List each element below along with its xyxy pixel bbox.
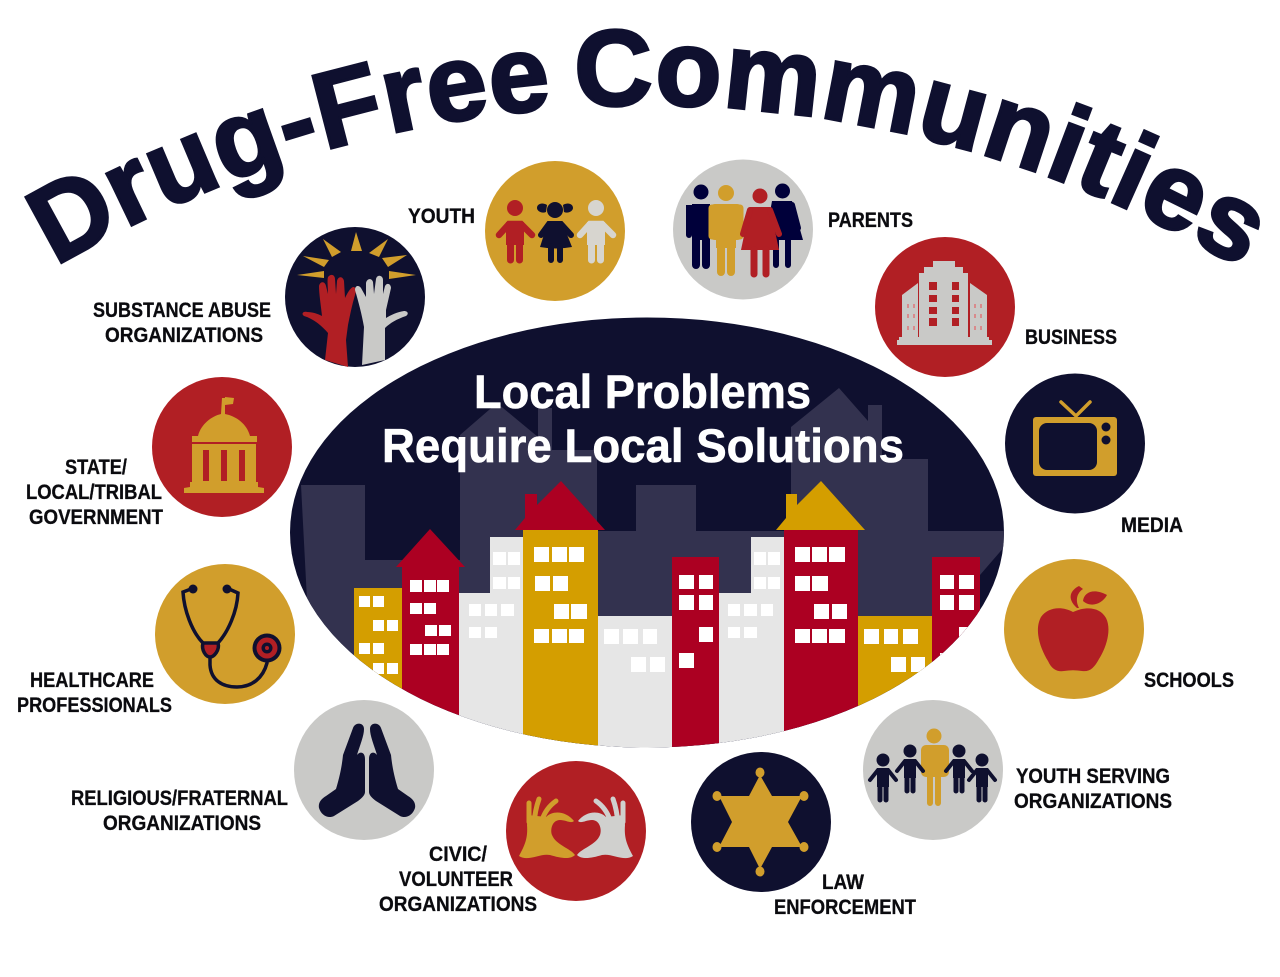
label: youth serving organizations: YOUTH SERVING xyxy=(1016,765,1170,788)
label: law enforcement xyxy=(774,871,916,919)
icon: media xyxy=(1005,374,1145,514)
foreground buildings xyxy=(354,481,980,753)
right praying hand xyxy=(369,724,415,817)
label: government: STATE/ xyxy=(65,456,127,479)
label: religious organizations: RELIGIOUS/FRATERNAL xyxy=(71,787,288,810)
white building right xyxy=(719,537,784,753)
gold hand xyxy=(519,799,575,858)
label: government xyxy=(26,456,163,529)
icon: parents xyxy=(673,160,813,300)
oval headline xyxy=(382,365,904,472)
oval headline: Local Problems xyxy=(474,365,811,418)
label: business: BUSINESS xyxy=(1025,326,1117,349)
icon: youth serving organizations xyxy=(863,700,1003,840)
label: substance abuse organizations: ORGANIZATIONS xyxy=(105,324,263,347)
label: religious organizations xyxy=(71,787,288,835)
sun rays xyxy=(297,232,416,279)
icon: law enforcement xyxy=(691,752,831,892)
oval headline: Require Local Solutions xyxy=(382,419,904,472)
label: civic volunteer organizations: ORGANIZATIONS xyxy=(379,893,537,916)
label: schools: SCHOOLS xyxy=(1144,669,1234,692)
icon: government xyxy=(152,377,292,517)
label: religious organizations: ORGANIZATIONS xyxy=(103,812,261,835)
central oval panel xyxy=(285,315,1010,755)
red building centre xyxy=(672,557,719,753)
child figure xyxy=(969,754,995,800)
label: healthcare professionals: HEALTHCARE xyxy=(30,669,154,692)
label: substance abuse organizations: SUBSTANCE ABUSE xyxy=(93,299,271,322)
child figure xyxy=(870,754,896,800)
label: substance abuse organizations xyxy=(93,299,271,347)
label: healthcare professionals xyxy=(17,669,172,717)
icon: schools xyxy=(1004,559,1144,699)
red building with roof xyxy=(396,529,465,716)
gold building far left xyxy=(354,588,402,689)
red hand xyxy=(303,275,356,367)
icon: substance abuse organizations xyxy=(285,227,425,367)
icon: healthcare xyxy=(155,564,295,704)
icon: religious organizations xyxy=(294,700,434,840)
label: government: GOVERNMENT xyxy=(29,506,163,529)
tall red building with gold roof xyxy=(776,481,865,753)
gold building right xyxy=(858,616,932,706)
label: healthcare professionals: PROFESSIONALS xyxy=(17,694,172,717)
tall gold building with red roof xyxy=(515,481,605,753)
label: youth: YOUTH xyxy=(408,205,475,228)
label: parents: PARENTS xyxy=(828,209,913,232)
label: civic volunteer organizations: CIVIC/ xyxy=(429,843,487,866)
label: youth serving organizations: ORGANIZATIONS xyxy=(1014,790,1172,813)
label: civic volunteer organizations xyxy=(379,843,537,916)
left praying hand xyxy=(319,724,365,817)
icon: youth xyxy=(485,161,625,301)
label: government: LOCAL/TRIBAL xyxy=(26,481,162,504)
grey hand xyxy=(577,799,633,858)
icon: business xyxy=(875,237,1015,377)
icon: civic volunteer organizations xyxy=(506,761,646,901)
title: Drug-Free Communities xyxy=(24,28,1260,264)
background skyline xyxy=(301,388,1006,750)
label: media: MEDIA xyxy=(1121,514,1183,537)
oval background xyxy=(285,315,1010,755)
white building centre xyxy=(598,616,672,753)
label: law enforcement: LAW xyxy=(822,871,864,894)
white building left xyxy=(459,537,523,753)
label: civic volunteer organizations: VOLUNTEER xyxy=(399,868,513,891)
label: law enforcement: ENFORCEMENT xyxy=(774,896,916,919)
label: youth serving organizations xyxy=(1014,765,1172,813)
child figure xyxy=(946,744,972,791)
grey hand xyxy=(355,276,408,365)
child figure xyxy=(897,744,923,791)
red building far right xyxy=(932,557,980,662)
